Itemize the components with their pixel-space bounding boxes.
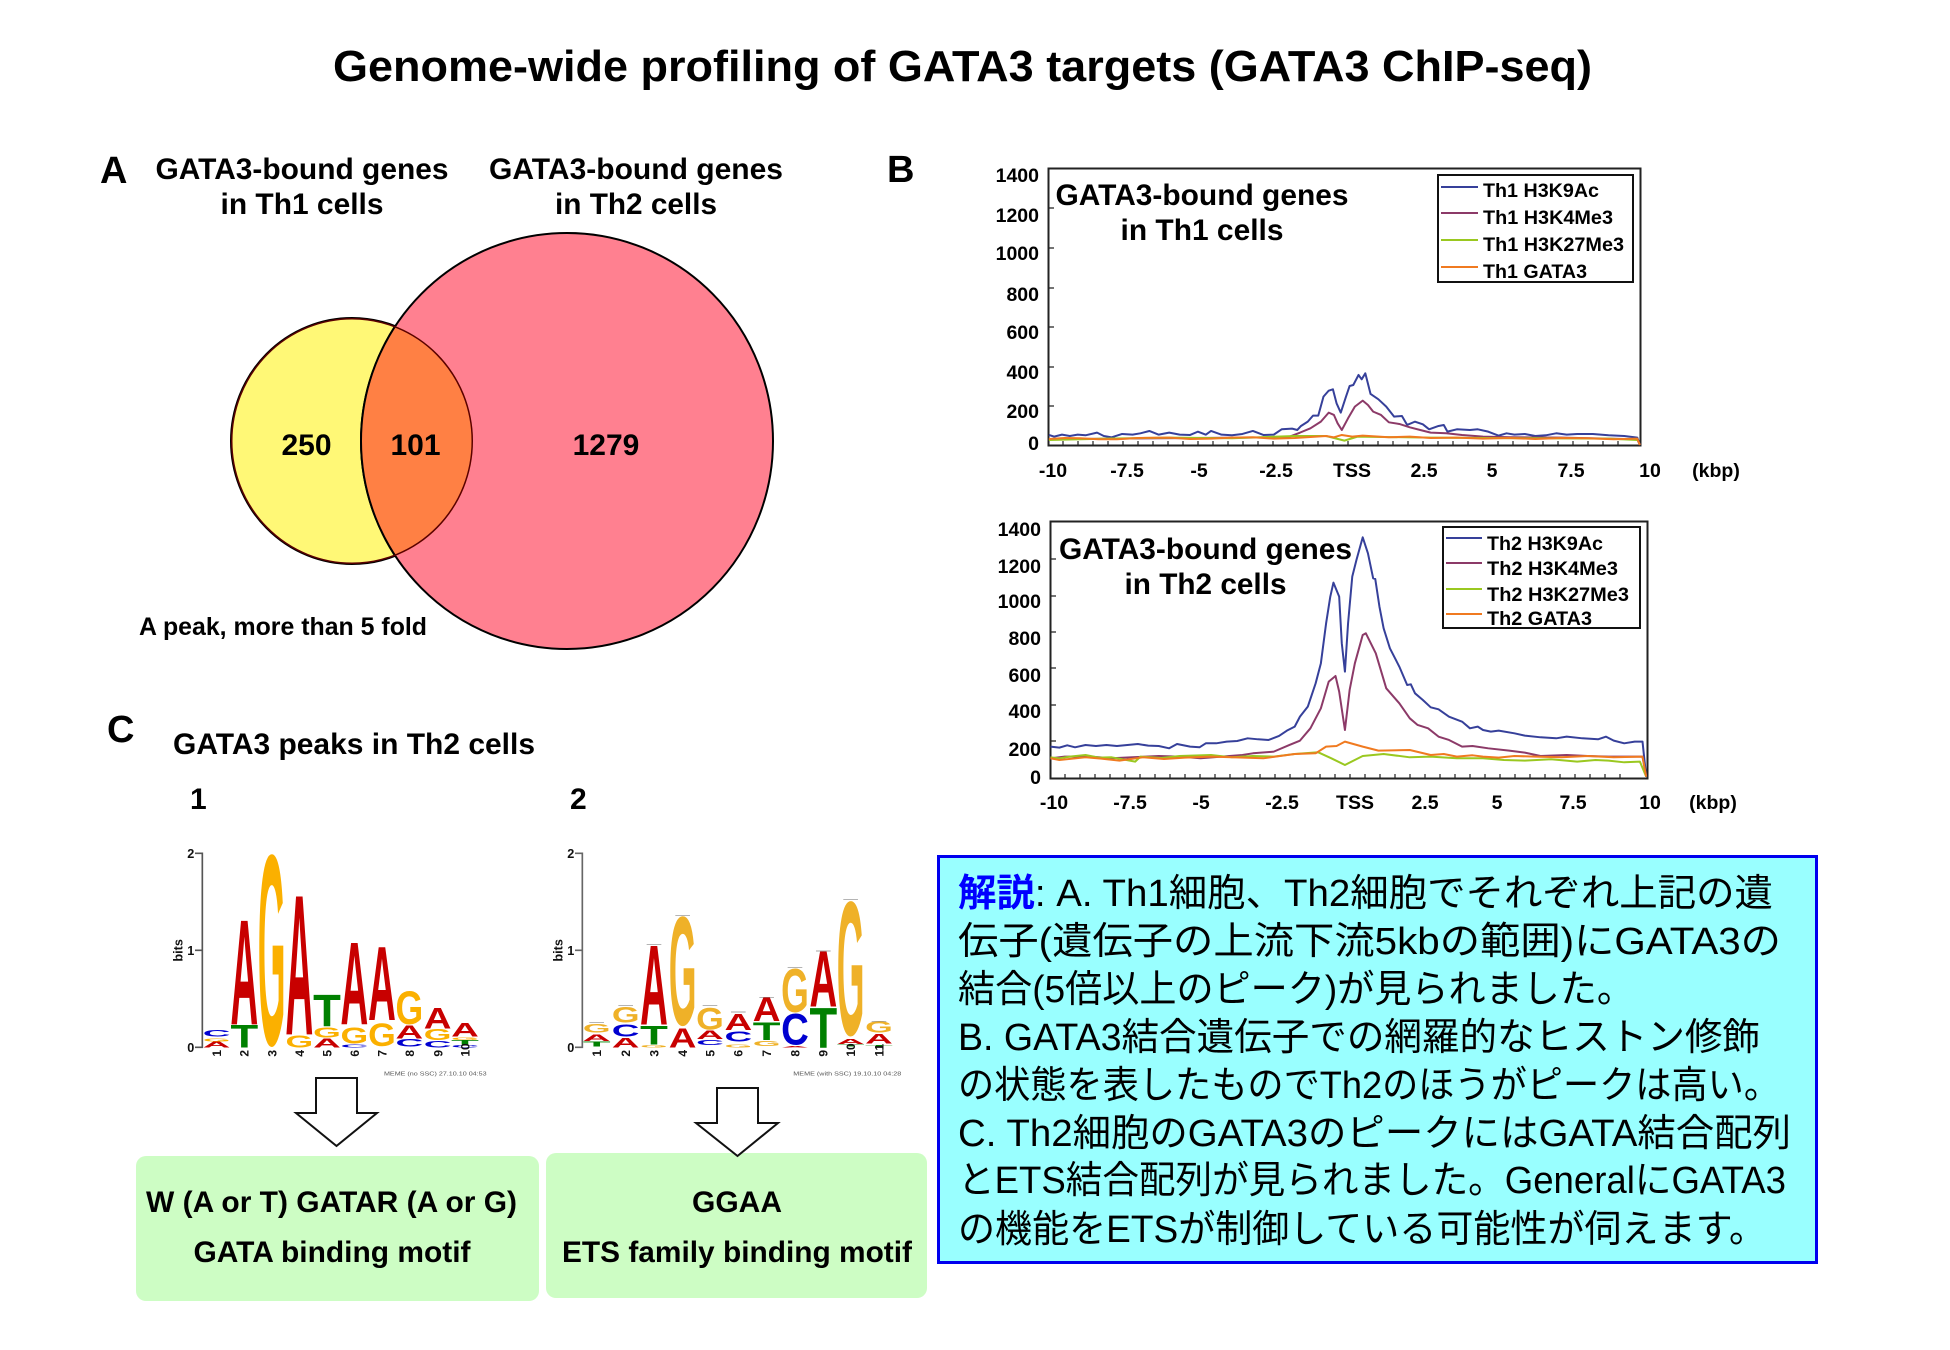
panel C heading: 2 bbox=[570, 783, 587, 816]
x axis labels: 10 bbox=[1639, 460, 1661, 482]
y axis labels: 400 bbox=[1006, 362, 1039, 384]
motif box: GATA bbox=[136, 1156, 539, 1301]
sequence logo 2: 1 bbox=[590, 1050, 604, 1057]
sequence logo 2: C bbox=[781, 1004, 809, 1054]
sequence logo 2 bbox=[552, 847, 901, 1078]
sequence logo 2: G bbox=[753, 1040, 780, 1048]
explanation text: とETS結合配列が見られました。GeneralにGATA3 bbox=[958, 1160, 1786, 1202]
data lines bbox=[1050, 537, 1646, 777]
count: Th1 only: 250 bbox=[281, 429, 332, 462]
sequence logo 1: 8 bbox=[403, 1050, 417, 1057]
sequence logo 2: 10 bbox=[844, 1043, 858, 1057]
sequence logo 2: A bbox=[865, 1031, 893, 1047]
heading: Th1 genes bbox=[156, 153, 448, 221]
sequence logo 1: G bbox=[395, 981, 423, 1034]
sequence logo 2: G bbox=[781, 956, 809, 1025]
sequence logo 2: 2 bbox=[567, 847, 574, 861]
x axis labels: -5 bbox=[1190, 460, 1208, 482]
legend bbox=[1438, 175, 1633, 283]
explanation text: 結合(5倍以上のピーク)が見られました。 bbox=[958, 969, 1634, 1011]
sequence logo 2: 9 bbox=[817, 1050, 831, 1057]
y axis labels: 200 bbox=[1008, 739, 1041, 761]
y axis labels: 1000 bbox=[996, 243, 1039, 265]
explanation text: の状態を表したものでTh2のほうがピークは高い。 bbox=[958, 1065, 1780, 1107]
sequence logo 1: T bbox=[451, 1039, 479, 1046]
sequence logo 2: T bbox=[583, 1040, 611, 1048]
sequence logo 2: G bbox=[583, 1022, 610, 1035]
venn circle: Th1 bbox=[231, 318, 473, 564]
y axis labels: 1200 bbox=[998, 556, 1041, 578]
chart heading bbox=[1059, 533, 1352, 601]
sequence logo 1: A bbox=[203, 1040, 231, 1049]
explanation text: の機能をETSが制御している可能性が伺えます。 bbox=[958, 1209, 1766, 1251]
sequence logo 2: 6 bbox=[732, 1050, 746, 1057]
sequence logo 1: A bbox=[395, 1022, 423, 1043]
sequence logo 2: G bbox=[865, 1018, 893, 1036]
count: Th2 only: 1279 bbox=[573, 429, 639, 462]
x axis labels: 10 bbox=[1639, 792, 1661, 814]
sequence logo 2: A bbox=[724, 1009, 752, 1035]
sequence logo 1: 6 bbox=[348, 1050, 362, 1057]
x axis labels: -5 bbox=[1192, 792, 1210, 814]
arrow: logo 1 to motif bbox=[296, 1078, 377, 1146]
sequence logo 1: 0 bbox=[187, 1041, 194, 1055]
sequence logo 1: A bbox=[451, 1019, 479, 1041]
sequence logo 2: G bbox=[612, 1003, 640, 1028]
sequence logo 1: C bbox=[203, 1029, 231, 1039]
sequence logo 1: C bbox=[395, 1037, 423, 1049]
sequence logo 2: A bbox=[837, 1037, 865, 1046]
chart heading: GATA3-bound genes bbox=[1056, 179, 1348, 212]
explanation text: 伝子(遺伝子の上流下流5kbの範囲)にGATA3の bbox=[958, 921, 1781, 963]
heading: Th1 genes: in Th1 cells bbox=[220, 188, 384, 221]
legend: Th2 H3K9Ac bbox=[1487, 534, 1603, 555]
x axis labels: -2.5 bbox=[1265, 792, 1299, 814]
explanation text: 解説: A. Th1細胞、Th2細胞でそれぞれ上記の遺 bbox=[958, 873, 1773, 915]
sequence logo 2: 11 bbox=[872, 1044, 886, 1057]
y axis labels bbox=[998, 519, 1041, 789]
sequence logo 2: G bbox=[724, 1043, 752, 1048]
y axis labels: 800 bbox=[1008, 628, 1041, 650]
sequence logo 1: G bbox=[424, 1025, 451, 1043]
plot frame bbox=[1050, 522, 1648, 778]
y axis labels: 1400 bbox=[998, 519, 1041, 541]
sequence logo 2: 7 bbox=[760, 1050, 774, 1057]
sequence logo 2: G bbox=[669, 884, 696, 1058]
chart heading: GATA3-bound genes bbox=[1059, 533, 1352, 566]
motif box: ETS: GGAA bbox=[692, 1186, 782, 1219]
heading: Th1 genes: GATA3-bound genes bbox=[156, 153, 448, 186]
sequence logo 1: T bbox=[230, 1019, 258, 1055]
explanation box bbox=[938, 856, 1816, 1262]
legend: Th2 GATA3 bbox=[1487, 609, 1592, 630]
sequence logo 2: A bbox=[640, 921, 668, 1048]
panel C heading bbox=[107, 709, 587, 816]
sequence logo 1: G bbox=[258, 799, 285, 1103]
x axis labels: -10 bbox=[1039, 460, 1067, 482]
sequence logo 1: A bbox=[285, 852, 313, 1077]
sequence logo 1: G bbox=[340, 1023, 368, 1049]
sequence logo 1: 2 bbox=[238, 1050, 252, 1057]
x axis labels: 2.5 bbox=[1410, 460, 1438, 482]
sequence logo 2: C bbox=[696, 1038, 724, 1047]
sequence logo 1: 7 bbox=[376, 1050, 390, 1057]
explanation text bbox=[958, 873, 1791, 1251]
sequence logo 1: 4 bbox=[293, 1050, 307, 1057]
y axis labels: 600 bbox=[1008, 665, 1041, 687]
chart: Th2 profile bbox=[998, 519, 1737, 814]
sequence logo 1: 3 bbox=[265, 1050, 279, 1057]
venn note: A peak, more than 5 fold bbox=[139, 613, 427, 641]
sequence logo 1: MEME (no SSC) 27.10.10 04:53 bbox=[384, 1072, 487, 1078]
sequence logo 1: A bbox=[340, 916, 368, 1050]
sequence logo 2: 2 bbox=[619, 1050, 633, 1057]
x axis labels: (kbp) bbox=[1689, 792, 1737, 814]
panel A: venn diagram bbox=[100, 150, 783, 649]
y axis labels: 800 bbox=[1006, 284, 1039, 306]
sequence logo 2: A bbox=[583, 1033, 611, 1043]
x axis labels: -7.5 bbox=[1110, 460, 1144, 482]
sequence logo 2: A bbox=[669, 1023, 697, 1054]
sequence logo 2: MEME (with SSC) 19.10.10 04:28 bbox=[793, 1072, 901, 1078]
y axis labels: 1000 bbox=[998, 591, 1041, 613]
x axis labels: TSS bbox=[1333, 460, 1371, 482]
sequence logo 1: A bbox=[368, 924, 396, 1043]
sequence logo 1: 10 bbox=[459, 1043, 473, 1057]
sequence logo 1: 1 bbox=[187, 944, 194, 958]
sequence logo 1: A bbox=[230, 890, 258, 1057]
chart heading bbox=[1056, 179, 1348, 247]
x axis labels: -10 bbox=[1040, 792, 1068, 814]
sequence logo 2: 8 bbox=[788, 1050, 802, 1057]
sequence logo 2: T bbox=[837, 1044, 865, 1047]
sequence logo 1: 9 bbox=[431, 1050, 445, 1057]
motif box: GATA: GATA binding motif bbox=[194, 1236, 471, 1269]
sequence logo 2: bits bbox=[552, 939, 566, 962]
panel letter A: A bbox=[100, 150, 127, 192]
heading: Th2 genes: in Th2 cells bbox=[555, 188, 717, 221]
sequence logo 2: T bbox=[753, 1017, 781, 1045]
sequence logo 1: G bbox=[313, 1024, 341, 1041]
sequence logo 2: 3 bbox=[647, 1050, 661, 1057]
panel C heading: GATA3 peaks in Th2 cells bbox=[173, 728, 535, 761]
heading: Th2 genes: GATA3-bound genes bbox=[489, 153, 783, 186]
sequence logo 1: 1 bbox=[210, 1050, 224, 1057]
chart: Th1 profile bbox=[996, 165, 1740, 482]
sequence logo 2: C bbox=[612, 1021, 640, 1041]
y axis labels: 200 bbox=[1006, 401, 1039, 423]
sequence logo 2: 5 bbox=[703, 1050, 717, 1057]
legend bbox=[1443, 527, 1640, 630]
sequence logo 1: C bbox=[340, 1043, 369, 1048]
y axis labels: 0 bbox=[1030, 767, 1041, 789]
sequence logo 2: A bbox=[781, 1045, 809, 1048]
y axis labels: 1400 bbox=[996, 165, 1039, 187]
legend: Th2 H3K4Me3 bbox=[1487, 559, 1618, 580]
motif box: GATA: W (A or T) GATAR (A or G) bbox=[146, 1186, 517, 1219]
x axis labels: 2.5 bbox=[1411, 792, 1439, 814]
sequence logo 2: A bbox=[809, 935, 837, 1024]
sequence logo 2: T bbox=[809, 995, 837, 1060]
y axis labels: 400 bbox=[1008, 701, 1041, 723]
x axis labels: 5 bbox=[1487, 460, 1498, 482]
x axis labels: 7.5 bbox=[1559, 792, 1587, 814]
legend: Th1 H3K9Ac bbox=[1483, 181, 1599, 202]
panel C heading: C bbox=[107, 709, 134, 751]
title: Genome-wide profiling of GATA3 targets (GATA3 ChIP-seq) bbox=[333, 42, 1592, 91]
sequence logo 2: T bbox=[640, 1020, 668, 1050]
motif box: ETS: ETS family binding motif bbox=[562, 1236, 913, 1269]
x axis labels bbox=[1039, 460, 1740, 482]
sequence logo 2: 4 bbox=[676, 1050, 690, 1057]
sequence logo 2: C bbox=[724, 1029, 752, 1045]
sequence logo 1: G bbox=[451, 1037, 479, 1041]
sequence logo 1: C bbox=[424, 1039, 451, 1049]
x axis labels: -2.5 bbox=[1259, 460, 1293, 482]
sequence logo 2: 1 bbox=[567, 944, 574, 958]
chart heading: in Th2 cells bbox=[1124, 568, 1286, 601]
sequence logo 1 bbox=[172, 799, 487, 1103]
venn overlap bbox=[231, 318, 473, 564]
panel C heading: 1 bbox=[190, 783, 207, 816]
sequence logo 1: G bbox=[203, 1037, 230, 1043]
legend: Th1 GATA3 bbox=[1483, 262, 1587, 283]
venn circle: Th2 bbox=[361, 233, 773, 649]
sequence logo 1: 2 bbox=[187, 847, 194, 861]
chart heading: in Th1 cells bbox=[1120, 214, 1284, 247]
panel letter B: B bbox=[887, 149, 914, 191]
sequence logo 2: G bbox=[640, 1044, 668, 1048]
plot frame bbox=[1048, 168, 1640, 446]
sequence logo 1: A bbox=[424, 1002, 451, 1035]
y axis labels: 1200 bbox=[996, 205, 1039, 227]
y axis labels bbox=[996, 165, 1039, 455]
sequence logo 1: G bbox=[285, 1032, 313, 1051]
x axis labels: 7.5 bbox=[1557, 460, 1585, 482]
data lines bbox=[1049, 373, 1640, 445]
motif box: ETS bbox=[546, 1153, 927, 1298]
sequence logo 2: T bbox=[865, 1045, 893, 1047]
sequence logo 2: A bbox=[696, 1028, 724, 1042]
sequence logo 1: T bbox=[313, 986, 341, 1037]
arrow: logo 2 to motif bbox=[696, 1088, 778, 1156]
sequence logo 2: G bbox=[696, 1002, 724, 1037]
y axis labels: 0 bbox=[1028, 433, 1039, 455]
sequence logo 1: G bbox=[368, 1017, 396, 1054]
heading: Th2 genes bbox=[489, 153, 783, 221]
legend: Th2 H3K27Me3 bbox=[1487, 585, 1629, 606]
explanation text: B. GATA3結合遺伝子での網羅的なヒストン修飾 bbox=[958, 1017, 1760, 1059]
explanation text: C. Th2細胞のGATA3のピークにはGATA結合配列 bbox=[958, 1113, 1791, 1155]
x axis labels bbox=[1040, 792, 1737, 814]
sequence logo 2: A bbox=[612, 1035, 640, 1051]
sequence logo 1: A bbox=[313, 1036, 341, 1050]
sequence logo 2: G bbox=[837, 862, 864, 1076]
legend: Th1 H3K27Me3 bbox=[1483, 235, 1624, 256]
sequence logo 2: A bbox=[753, 990, 780, 1028]
x axis labels: (kbp) bbox=[1692, 460, 1740, 482]
legend: Th1 H3K4Me3 bbox=[1483, 208, 1613, 229]
sequence logo 1: C bbox=[451, 1044, 479, 1048]
count: overlap: 101 bbox=[390, 429, 441, 462]
x axis labels: -7.5 bbox=[1113, 792, 1147, 814]
sequence logo 1: 5 bbox=[321, 1050, 335, 1057]
sequence logo 2: 0 bbox=[567, 1041, 574, 1055]
y axis labels: 600 bbox=[1006, 322, 1039, 344]
x axis labels: 5 bbox=[1492, 792, 1503, 814]
x axis labels: TSS bbox=[1336, 792, 1374, 814]
sequence logo 1: bits bbox=[172, 939, 186, 962]
